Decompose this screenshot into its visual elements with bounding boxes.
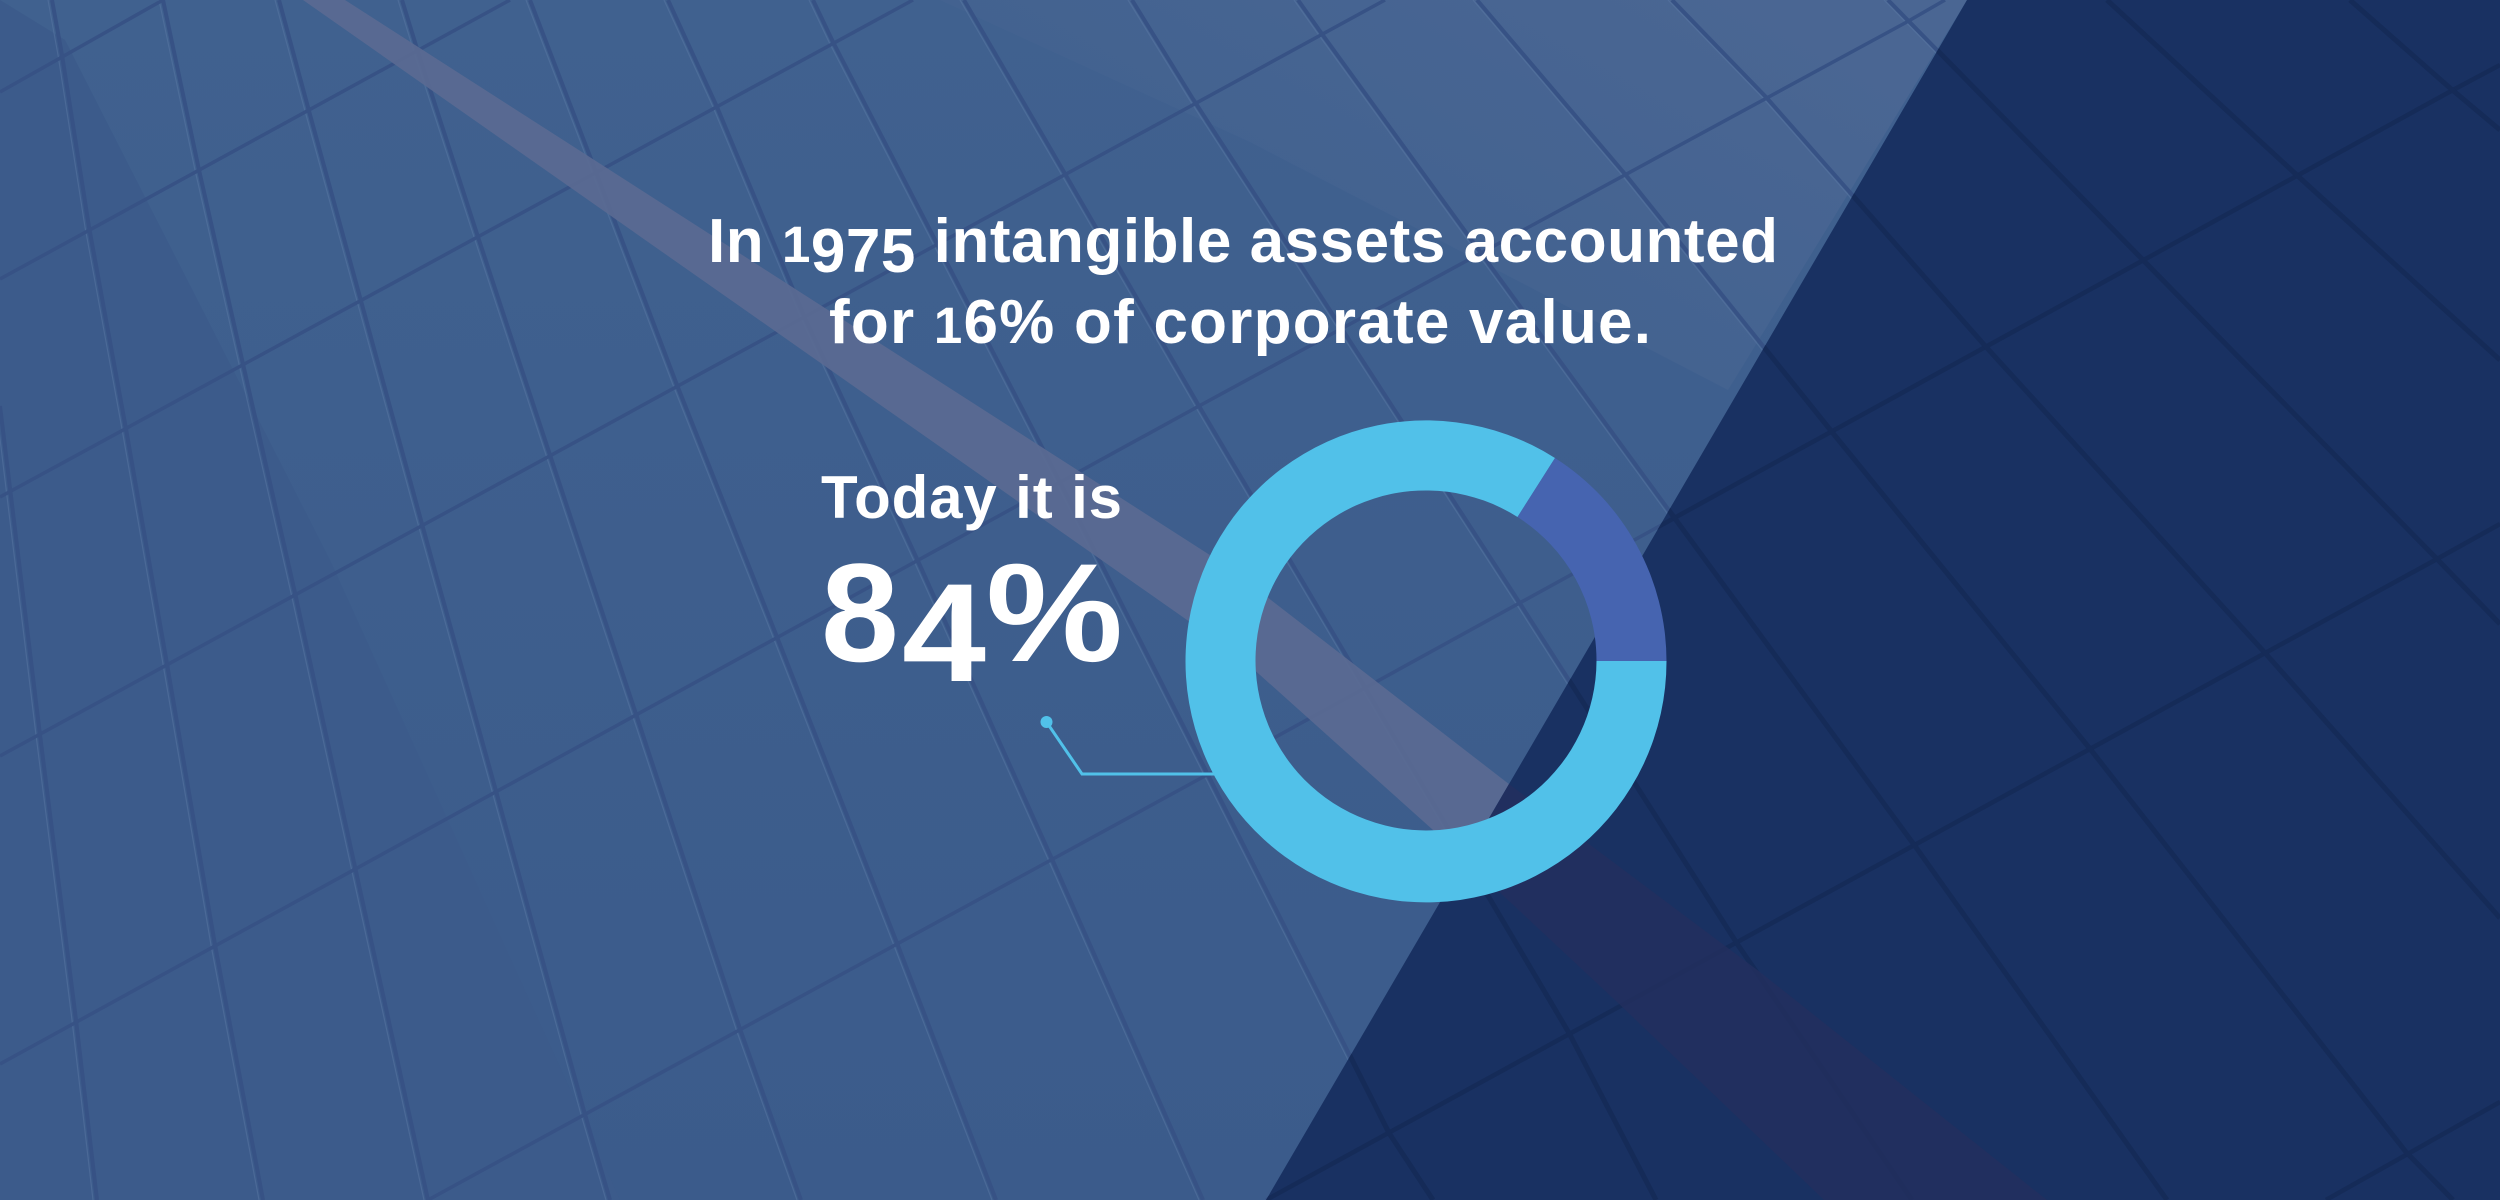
title: [708, 207, 1778, 286]
donut chart: [1186, 420, 1667, 902]
title line 1: 975: [811, 217, 915, 286]
big percentage: 8: [821, 534, 899, 691]
callout pointer: [1040, 716, 1225, 774]
big percentage: 4: [902, 554, 986, 711]
donut segment: 84%: [1186, 420, 1667, 902]
today label: Today it is: [821, 464, 1122, 531]
background: dark facade panel: [1266, 0, 2500, 1200]
background: light facade panel: [0, 0, 1966, 1200]
title line 1: intangible assets accounted: [916, 207, 1778, 276]
title line 2: for 16% of corporate value.: [829, 288, 1651, 357]
title line 1: In 1: [708, 207, 810, 276]
donut segment: 16%: [1518, 458, 1666, 661]
big percentage: %: [986, 534, 1123, 691]
big percentage: [821, 534, 1123, 711]
